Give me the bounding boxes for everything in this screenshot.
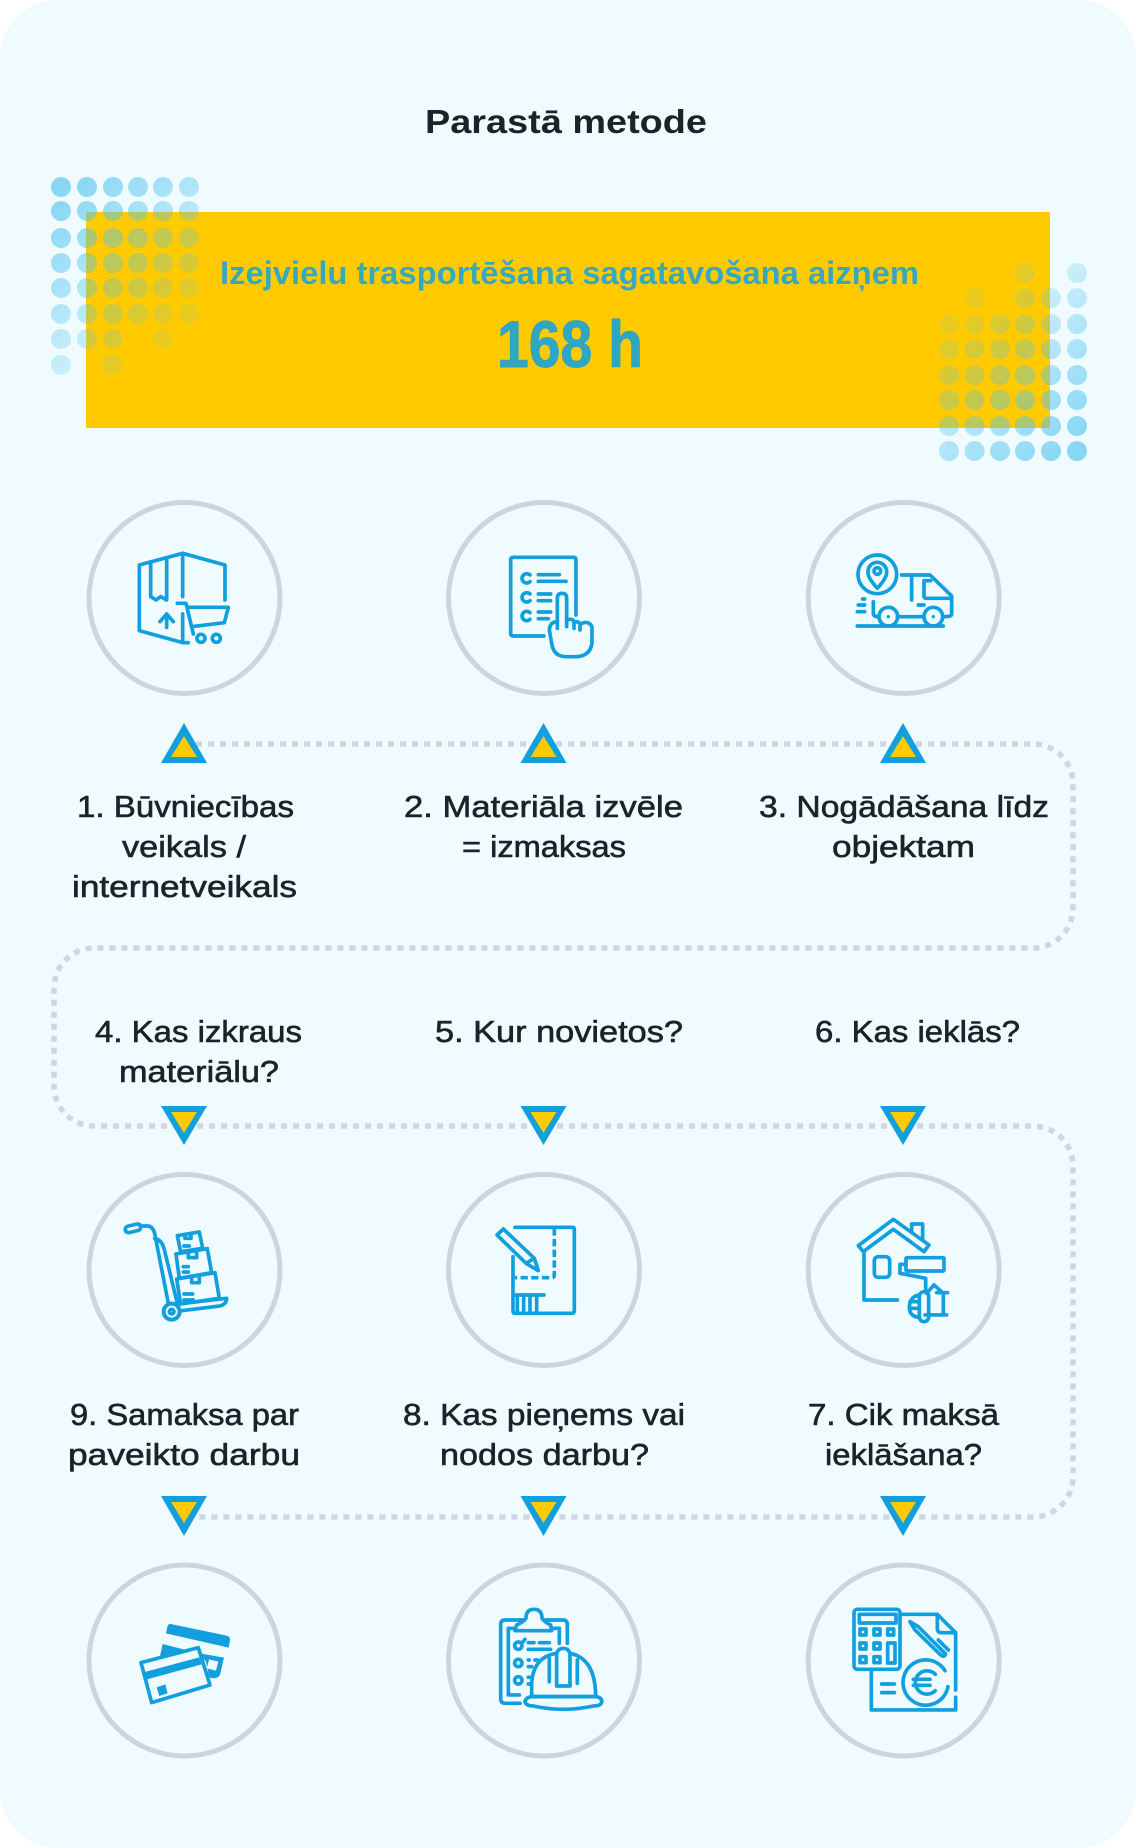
arrow 1 [161, 723, 207, 763]
step 3 label [759, 789, 1049, 864]
step 1 label: 1. Būvniecības [77, 789, 294, 824]
step 7 label: 7. Cik maksā [808, 1397, 1000, 1432]
step 2 label: = izmaksas [462, 829, 626, 864]
step 1: shop icon [89, 502, 280, 694]
step 8 label: nodos darbu? [440, 1437, 649, 1472]
step 3 label: objektam [832, 829, 975, 864]
step 8 label: 8. Kas pieņems vai [403, 1397, 685, 1432]
title: Parastā metode [425, 103, 707, 140]
arrow 3 [880, 723, 926, 763]
decorative dots: top left [51, 177, 199, 375]
step 5 label: 5. Kur novietos? [435, 1014, 683, 1049]
dotted process path [54, 744, 1073, 1517]
step 3 label: 3. Nogādāšana līdz [759, 789, 1049, 824]
arrow 5 [520, 1106, 566, 1145]
decorative dots: bottom right [939, 263, 1087, 461]
yellow highlight box [86, 212, 1050, 428]
step 2 label: 2. Materiāla izvēle [404, 789, 683, 824]
highlight subtitle: Izejvielu trasportēšana sagatavošana aizņem [220, 255, 919, 291]
highlight number: 168 h [497, 307, 643, 381]
step 4 label: 4. Kas izkraus [95, 1014, 302, 1049]
step 7 top: house painting icon [808, 1174, 999, 1366]
step 9 top: hand truck icon [89, 1174, 280, 1366]
step 4 label [95, 1014, 302, 1089]
step 3: delivery truck icon [808, 502, 999, 694]
step 2 label [404, 789, 683, 864]
step 1 label [72, 789, 297, 904]
clipboard and hard hat icon [448, 1565, 640, 1756]
step 4 label: materiālu? [119, 1054, 279, 1089]
step 2: checklist icon [448, 502, 640, 694]
arrow 8 [520, 1496, 566, 1536]
arrow 7 [880, 1496, 926, 1536]
arrow 6 [880, 1106, 926, 1145]
calculator and invoice icon [808, 1565, 999, 1756]
arrow 2 [520, 723, 566, 763]
step 8 label [403, 1397, 685, 1472]
arrow 9 [161, 1496, 207, 1536]
step 9 label: paveikto darbu [68, 1437, 300, 1472]
step 9 label: 9. Samaksa par [70, 1397, 299, 1432]
step 6 label: 6. Kas ieklās? [815, 1014, 1020, 1049]
payment cards icon [89, 1565, 280, 1756]
step 9 label [68, 1397, 300, 1472]
step 1 label: internetveikals [72, 869, 297, 904]
arrow 4 [161, 1106, 207, 1145]
step 7 label: ieklāšana? [825, 1437, 982, 1472]
step 7 label [808, 1397, 1000, 1472]
step 8 top: plan and pencil icon [448, 1174, 640, 1366]
step 1 label: veikals / [122, 829, 246, 864]
